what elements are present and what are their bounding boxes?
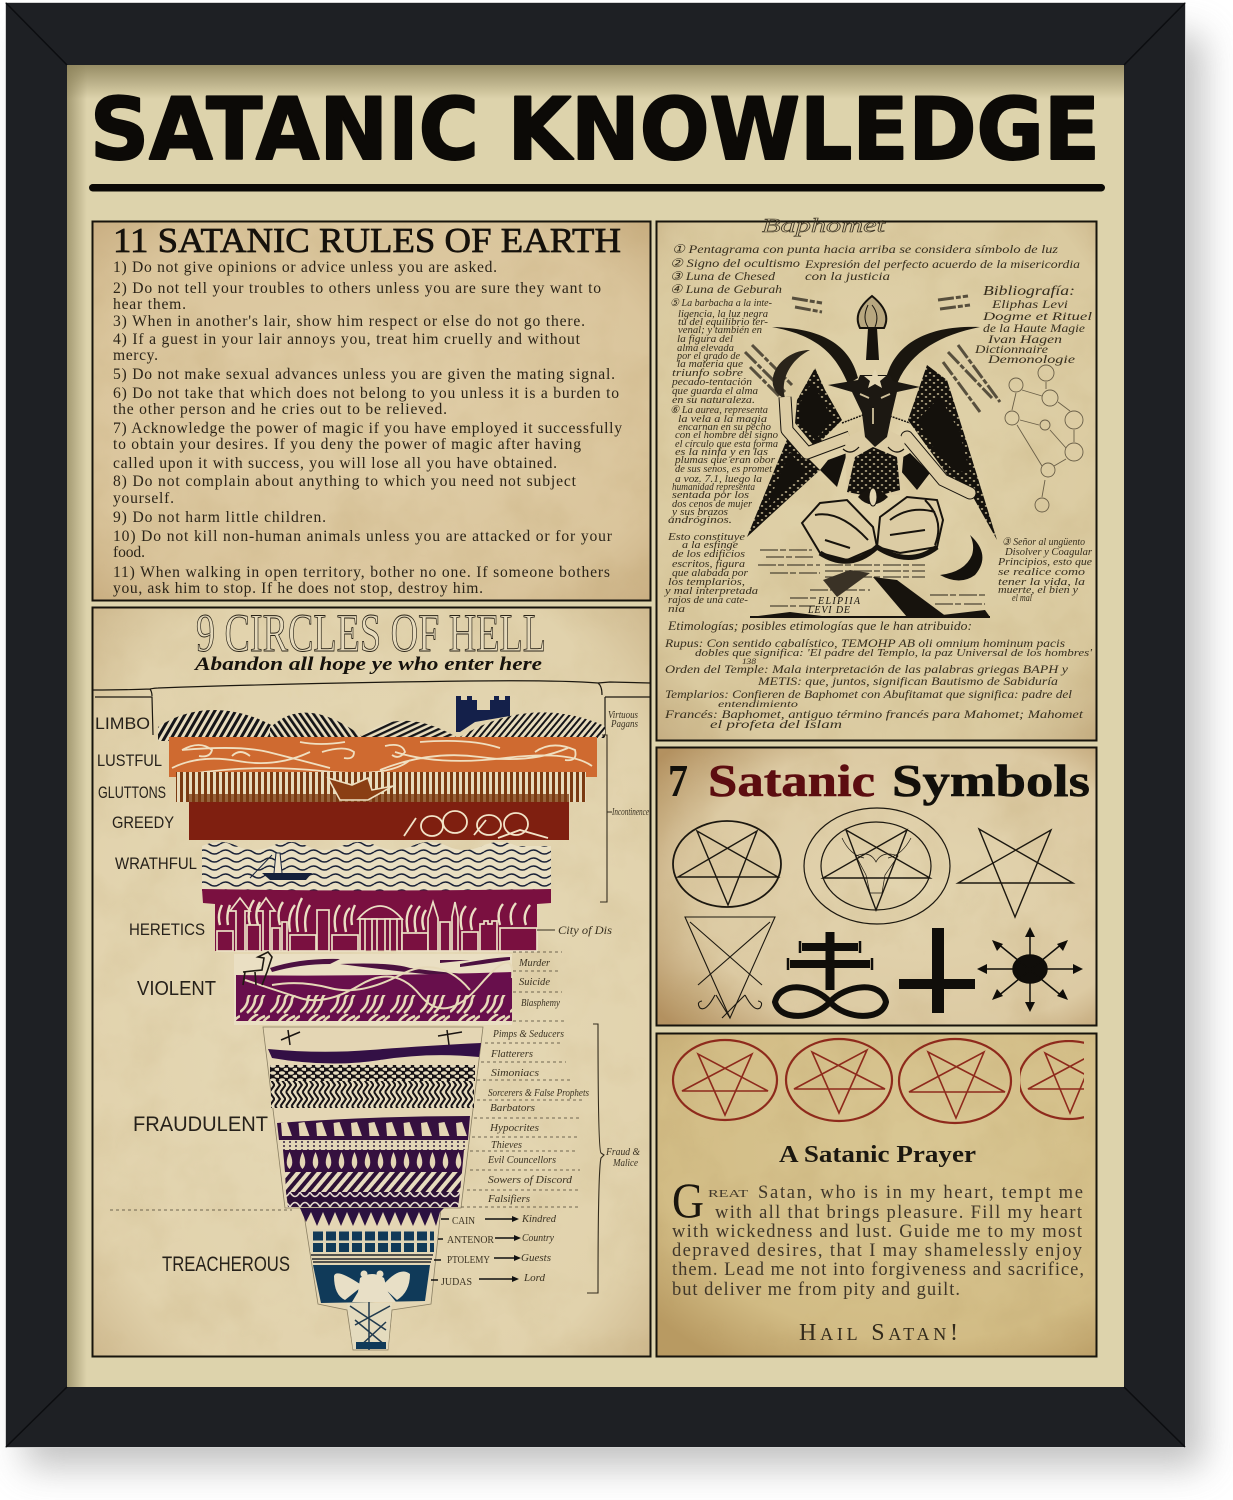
panel: A Satanic Prayer	[656, 1034, 1119, 1356]
heading: symbols: Satanic	[708, 755, 875, 806]
heading: 9 circles of hell: 9 CIRCLES OF HELL	[196, 603, 546, 663]
traitors with arrows: Guests	[521, 1253, 551, 1264]
rules list: the other person and he cries out to be relieved.	[113, 401, 447, 418]
red pentagrams row	[673, 1039, 1119, 1123]
icon: sigil of Baphomet	[804, 808, 950, 924]
handwritten notes: right column	[974, 284, 1093, 604]
side annotations: Fraud &	[605, 1147, 640, 1158]
heading: rules: 11 SATANIC RULES OF EARTH	[113, 221, 621, 260]
traitors with arrows: JUDAS	[441, 1277, 472, 1288]
handwritten notes: left column: el círculo que esta forma	[675, 439, 778, 450]
handwritten notes: top: Expresión del perfecto acuerdo de la misericordia	[804, 257, 1080, 271]
traitors with arrows: Kindred	[521, 1214, 557, 1225]
handwritten notes: bottom: Templarios: Confieren de Baphomet con Abufitamat que significa: padre del	[665, 687, 1073, 701]
handwritten notes: bottom: Etimologías; posibles etimologías que le han atribuido:	[667, 618, 972, 633]
closing line: HAIL SATAN!	[799, 1320, 958, 1346]
side annotations: Pimps & Seducers	[492, 1029, 564, 1040]
traitors with arrows: ANTENOR	[447, 1235, 494, 1246]
traitors with arrows: Country	[522, 1233, 555, 1244]
rules list: 7) Acknowledge the power of magic if you have employed it successfully	[113, 420, 622, 437]
base	[758, 550, 985, 606]
side annotations	[110, 710, 649, 1293]
circle names	[95, 714, 290, 1276]
side annotations: Murder	[518, 958, 550, 969]
rules list: mercy.	[113, 347, 158, 364]
panel: Baphomet manuscript	[656, 215, 1096, 740]
title rule	[89, 184, 1105, 192]
right wing	[908, 365, 997, 540]
torch	[858, 296, 886, 328]
title: SATANIC KNOWLEDGE	[90, 80, 1100, 180]
handwritten notes: left column: y mal interpretada	[664, 586, 758, 597]
icon: castle	[456, 696, 510, 732]
icon: inverted pentagram in circle	[673, 821, 781, 907]
side annotations: Hypocrites	[489, 1123, 539, 1134]
handwritten notes: bottom: 138	[742, 657, 756, 666]
handwritten notes: right column: Eliphas Levi	[991, 297, 1068, 311]
traitors with arrows: PTOLEMY	[447, 1255, 490, 1266]
handwritten notes: right column: Dictionnaire	[974, 342, 1049, 356]
necklace	[842, 415, 910, 423]
rules list: 11) When walking in open territory, bother no one. If someone bothers	[113, 564, 610, 581]
side annotations: Evil Councellors	[487, 1155, 556, 1166]
flames	[219, 898, 530, 932]
handwritten notes: left column: es la ninfa y en las	[675, 447, 768, 458]
bolgia 5	[281, 1140, 465, 1150]
rules list: 4) If a guest in your lair annoys you, treat him cruelly and without	[113, 331, 581, 348]
circle names: GLUTTONS	[98, 783, 166, 802]
handwritten notes: left column: sentada por los	[672, 490, 749, 501]
web tip	[347, 1303, 392, 1349]
handwritten notes: left column: nia	[668, 604, 685, 615]
handwritten notes: left column: la figura del	[677, 334, 733, 345]
handwritten notes: left column: andróginos.	[668, 515, 732, 526]
rules list: to obtain your desires. If you deny the power of magic after having	[113, 436, 581, 453]
side annotations: Barbators	[490, 1103, 535, 1114]
handwritten notes: left column: rajos de una cate-	[668, 595, 749, 606]
handwritten notes: left column: con el hombre del signo	[675, 430, 778, 441]
handwritten notes: right column: Principios, esto que	[997, 557, 1092, 568]
base inscription: ELIPIIA	[817, 596, 861, 607]
handwritten notes: right column: Bibliografía:	[983, 284, 1075, 299]
crescent upper left	[773, 350, 810, 398]
ice stripes	[311, 1255, 433, 1262]
circle names: HERETICS	[129, 920, 205, 939]
side annotations: Virtuous	[608, 710, 638, 721]
small network diagram	[1005, 365, 1083, 512]
ice grid	[310, 1229, 434, 1252]
handwritten notes: left column: plumas que eran obor	[674, 455, 776, 466]
handwritten notes: right column: ③ Señor al ungüento	[1002, 537, 1085, 548]
handwritten notes: right column: muerte, el bien y	[998, 585, 1078, 596]
handwritten notes: left column: que guarda el alma	[672, 386, 758, 397]
handwritten notes: left column: de los edificios	[672, 549, 745, 560]
circle names: LUSTFUL	[97, 751, 162, 770]
panel: 9 Circles of Hell	[92, 603, 650, 1356]
heading: symbols: Symbols	[892, 755, 1090, 806]
prayer body: them. Lead me not into forgiveness and sacrifice,	[672, 1260, 1084, 1280]
bolgia 8	[286, 1192, 460, 1207]
icon: leviathan cross	[775, 932, 886, 1016]
handwritten notes: left column: la materia que	[677, 359, 743, 370]
circle names: TREACHEROUS	[162, 1253, 290, 1276]
prayer body: G	[672, 1172, 704, 1228]
handwritten notes: top	[670, 242, 1080, 296]
handwritten notes: left column: ⑥ La aurea, representa	[670, 405, 768, 416]
layer: treacherous	[300, 1208, 444, 1350]
heading: prayer: A Satanic Prayer	[779, 1142, 976, 1168]
handwritten notes: right column: Dogme et Rituel	[982, 309, 1093, 323]
handwritten notes: left column: triunfo sobre	[672, 368, 743, 379]
circle names: VIOLENT	[137, 978, 216, 1000]
rules list: 6) Do not take that which does not belong to you unless it is a burden to	[113, 385, 619, 402]
horns	[772, 327, 858, 384]
traitors with arrows	[431, 1214, 557, 1288]
rules list: 5) Do not make sexual advances unless you are given the mating signal.	[113, 366, 615, 383]
rules list: hear them.	[113, 296, 186, 313]
side annotations: City of Dis	[558, 923, 612, 937]
handwritten notes: left column: ⑤ La barbacha a la inte-	[670, 298, 772, 309]
city of Dis	[217, 898, 537, 951]
layer: lustful	[169, 737, 597, 777]
handwritten notes: right column: se realice como	[998, 567, 1085, 578]
rules list: 10) Do not kill non-human animals unless you are attacked or for your	[113, 528, 613, 545]
rules list: 9) Do not harm little children.	[113, 509, 326, 526]
handwritten notes: left column: por el grado de	[676, 351, 740, 362]
handwritten notes: bottom: Francés: Baphomet, antiguo término francés para Mahomet; Mahomet	[664, 707, 1084, 721]
torso	[845, 430, 905, 495]
side annotations: Sorcerers & False Prophets	[488, 1088, 589, 1099]
heading: symbols	[668, 755, 1090, 806]
side annotations: Falsifiers	[487, 1194, 530, 1205]
rules list: 8) Do not complain about anything to which you need not subject	[113, 473, 577, 490]
handwritten notes: left column: a voz. 7.1, luego la	[675, 474, 762, 485]
handwritten notes: bottom: entendimiento	[718, 699, 799, 709]
prayer body	[672, 1172, 1084, 1300]
handwritten notes: left column: humanidad representa	[672, 482, 755, 493]
handwritten notes: left column: la vela a la magia	[678, 414, 767, 425]
rules list: 1) Do not give opinions or advice unless you are asked.	[113, 259, 497, 276]
handwritten notes: top: ② Signo del ocultismo	[670, 256, 800, 270]
bolgia 7	[285, 1172, 462, 1192]
handwritten notes: bottom	[664, 618, 1093, 731]
handwritten heading: Baphomet	[762, 215, 886, 237]
prayer body: REAT	[708, 1188, 748, 1200]
side annotations: Incontinence	[611, 807, 649, 818]
handwritten notes: top: ③ Luna de Chesed	[670, 269, 776, 283]
traitors with arrows: Lord	[523, 1273, 546, 1284]
left wing	[795, 368, 842, 447]
prayer body: Satan, who is in my heart, tempt me	[758, 1183, 1083, 1203]
handwritten notes: left column: alma elevada	[677, 343, 734, 354]
rules list: 2) Do not tell your troubles to others unless you are sure they want to	[113, 280, 601, 297]
ground line	[93, 681, 650, 735]
handwritten notes: left column: ligencia, la luz negra	[678, 309, 768, 320]
center eye	[858, 488, 888, 504]
side annotations: Simoniacs	[491, 1068, 539, 1079]
side annotations: Blasphemy	[521, 998, 560, 1009]
circle names: LIMBO	[95, 714, 150, 733]
handwritten notes: top: ④ Luna de Geburah	[670, 282, 782, 296]
illustration: Baphomet	[745, 296, 1000, 617]
crossed legs	[802, 500, 877, 560]
layer: greedy	[189, 802, 569, 840]
heading: symbols: 7	[668, 755, 688, 806]
side annotations: Pagans	[610, 719, 638, 730]
subheading: Abandon all hope ye who enter here	[194, 654, 543, 675]
base inscription	[807, 596, 861, 616]
side annotations: Sowers of Discord	[488, 1175, 573, 1186]
panel: 11 Satanic Rules of Earth	[92, 221, 650, 600]
traitors with arrows: CAIN	[452, 1216, 475, 1227]
handwritten notes: top: ① Pentagrama con punta hacia arriba se considera símbolo de luz	[672, 242, 1058, 256]
rules list: yourself.	[113, 490, 174, 507]
icon: chaos star	[977, 927, 1083, 1012]
rules list	[113, 259, 622, 597]
layer: limbo	[158, 696, 605, 741]
handwritten notes: bottom: Orden del Temple: Mala interpretación de las palabras griegas BAPH y	[665, 662, 1069, 676]
bolgia 4	[277, 1116, 470, 1140]
handwritten notes: left column: de sus senos, es promet	[675, 464, 773, 475]
handwritten notes: left column	[664, 298, 778, 615]
bolgia 1	[268, 1043, 481, 1064]
layer: wrathful	[202, 842, 551, 892]
handwritten notes: left column: venal; y también en	[678, 325, 762, 336]
handwritten notes: left column: dos cenos de mujer	[672, 499, 753, 510]
side annotations: Malice	[612, 1158, 639, 1169]
circle names: FRAUDULENT	[133, 1113, 268, 1136]
handwritten notes: top: con la justicia	[805, 269, 890, 283]
handwritten notes: bottom: dobles que significa: 'El padre del Templo, la paz Universal de los hombres'	[695, 648, 1093, 659]
circle names: WRATHFUL	[115, 854, 197, 873]
feather smudges	[745, 296, 1000, 412]
layer: heretics	[202, 889, 551, 951]
rules list: called upon it with success, you will lose all you have obtained.	[113, 455, 557, 472]
head	[828, 375, 920, 447]
base inscription: LEVI DE	[807, 605, 850, 616]
handwritten notes: right column: el mal	[1012, 593, 1032, 604]
prayer body: with all that brings pleasure. Fill my heart	[715, 1203, 1083, 1223]
cream mat	[67, 65, 1124, 1387]
handwritten notes: right column: Ivan Hagen	[987, 332, 1062, 346]
navy pit with Satan	[313, 1265, 430, 1303]
handwritten notes: left column: que alabada por	[672, 568, 749, 579]
icon: inverted cross	[899, 928, 975, 1013]
handwritten notes: left column: tu del equilibrio ter-	[678, 317, 769, 328]
layer: violent	[234, 952, 512, 1025]
handwritten notes: left column: escritos, figura	[672, 559, 745, 570]
icon: inverted pentagram	[958, 829, 1073, 917]
handwritten notes: bottom: el profeta del Islam	[710, 717, 842, 731]
handwritten notes: bottom: Rupus: Con sentido cabalístico, TEMOHP AB oli omnium hominum pacis	[664, 636, 1065, 650]
handwritten notes: left column: a la esfinge	[682, 540, 738, 551]
prayer body: depraved desires, that I may shamelessly enjoy	[672, 1241, 1083, 1261]
rules list: 3) When in another's lair, show him respect or else do not go there.	[113, 313, 585, 330]
circle names: GREEDY	[112, 813, 174, 832]
icicles	[300, 1208, 444, 1226]
handwritten notes: bottom: METIS: que, juntos, significan Bautismo de Sabiduría	[757, 674, 1058, 688]
handwritten notes: right column: tener la vida, la	[998, 577, 1085, 588]
crescent lower right	[940, 535, 982, 580]
handwritten notes: left column: los templarios,	[668, 577, 745, 588]
handwritten notes: left column: en su naturaleza.	[672, 395, 755, 406]
icon: sigil of Lucifer	[685, 917, 775, 1018]
handwritten notes: left column: y sus brazos	[671, 507, 728, 518]
side annotations: Suicide	[519, 977, 551, 988]
prayer body: but deliver me from pity and guilt.	[672, 1280, 960, 1300]
centaur	[243, 952, 272, 985]
handwritten notes: right column: de la Haute Magie	[983, 321, 1086, 335]
side annotations: Thieves	[491, 1140, 522, 1151]
bolgia 6	[283, 1150, 464, 1172]
prayer body: with wickedness and lust. Guide me to my most	[672, 1222, 1083, 1242]
handwritten notes: left column: pecado-tentación	[671, 377, 752, 388]
handwritten notes: right column: Disolver y Coagular	[1004, 547, 1093, 558]
rules list: food.	[113, 544, 145, 561]
layer: fraudulent (malebolge)	[263, 1027, 483, 1208]
panel: 7 Satanic Symbols	[656, 748, 1096, 1026]
handwritten notes: left column: encarnan en su pecho	[678, 422, 771, 433]
rules list: you, ask him to stop. If he does not stop, destroy him.	[113, 580, 483, 597]
handwritten notes: left column: Esto constituye	[667, 532, 745, 543]
bolgia 2 and 3	[270, 1065, 475, 1081]
handwritten notes: right column: Demonologie	[987, 352, 1076, 366]
layer: gluttons	[176, 772, 586, 802]
arms	[785, 397, 850, 453]
side annotations: Flatterers	[490, 1049, 533, 1060]
